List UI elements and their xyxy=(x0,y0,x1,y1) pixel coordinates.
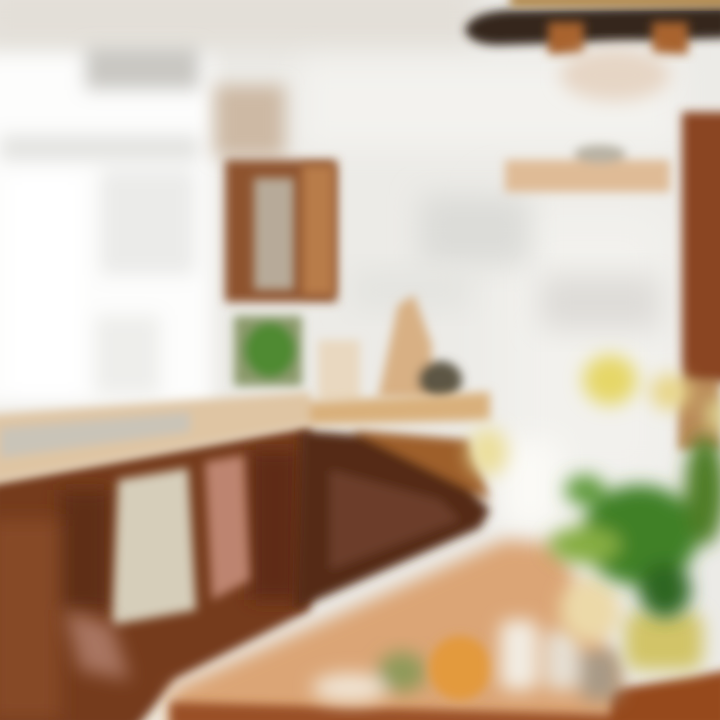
plate and bowl xyxy=(312,652,426,703)
orange fruit xyxy=(429,636,491,700)
ceiling lamp xyxy=(465,0,720,101)
table front edge xyxy=(170,670,720,720)
towel: faded lower left xyxy=(65,610,130,680)
yellow flowers xyxy=(468,355,720,476)
upper cabinet xyxy=(215,85,337,302)
towel: cream xyxy=(112,468,196,625)
countertop xyxy=(0,392,490,484)
table underside white gap xyxy=(120,670,175,720)
wooden table xyxy=(170,540,620,720)
vase xyxy=(560,578,703,670)
right upper post xyxy=(678,112,720,450)
lower cabinets corner xyxy=(295,430,490,610)
towel: pink xyxy=(205,455,250,600)
plant leaves xyxy=(549,435,720,618)
white cups xyxy=(500,620,620,700)
cutting boards xyxy=(318,295,462,402)
wall shelf xyxy=(505,145,670,192)
cabinet shadow panels xyxy=(0,450,300,720)
potted herb xyxy=(234,316,302,386)
window xyxy=(0,48,212,405)
lower cabinets left xyxy=(0,425,310,720)
